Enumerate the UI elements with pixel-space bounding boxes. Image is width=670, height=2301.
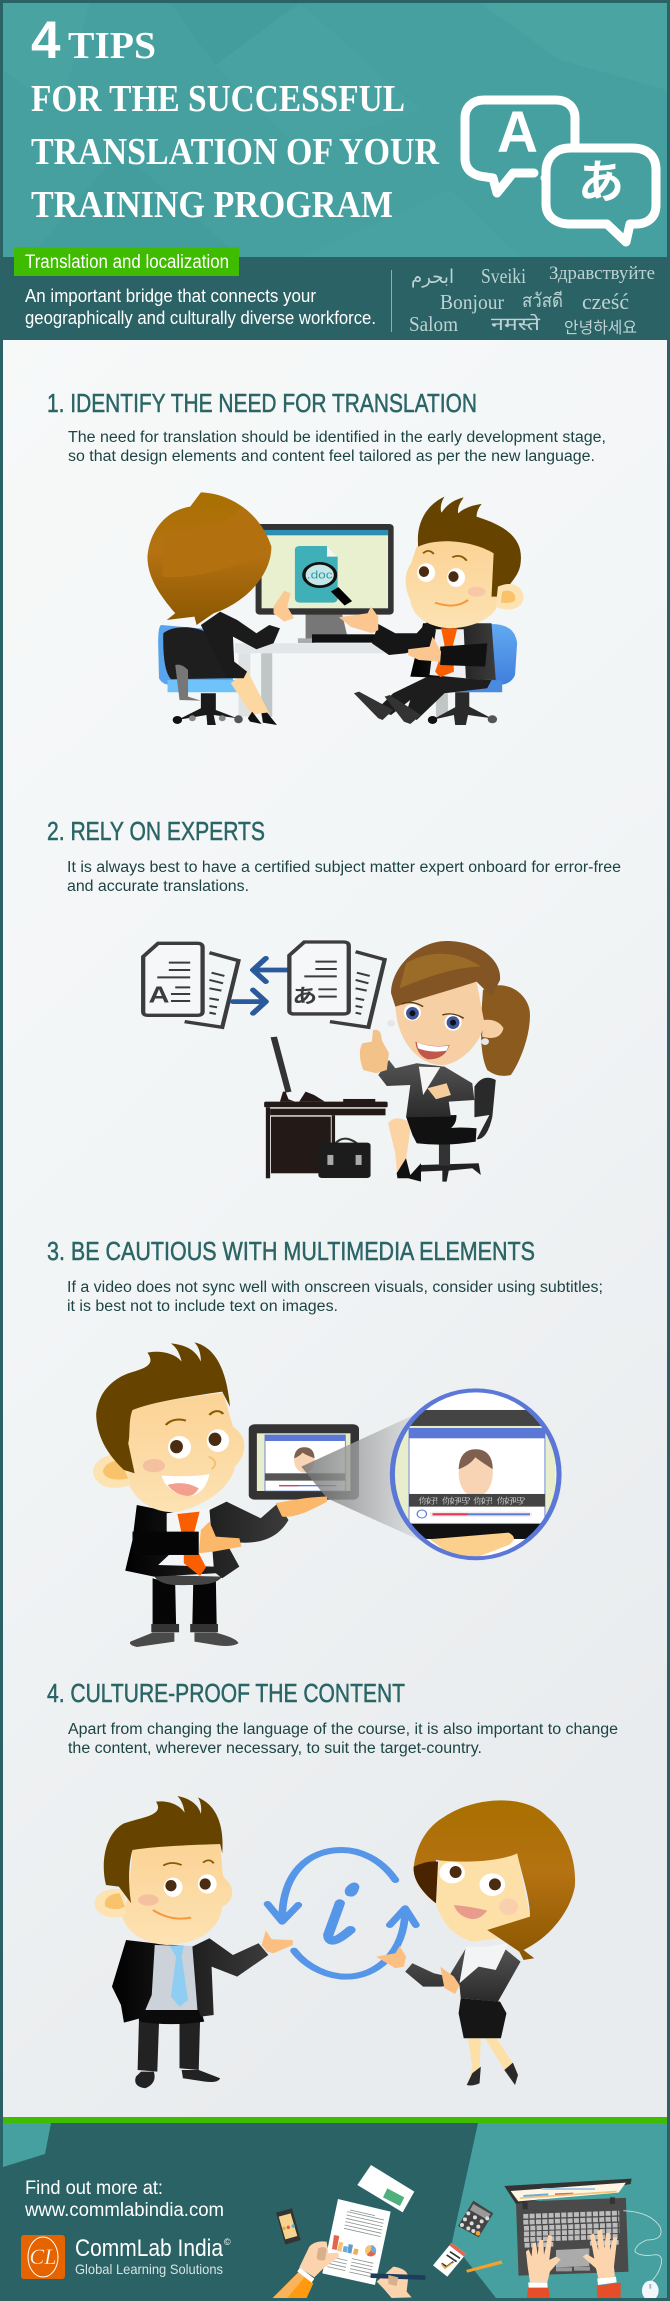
greetings in many languages: cześć (582, 289, 629, 314)
subheader text: An important bridge that connects your (25, 285, 316, 306)
tip 4 text: Apart from changing the language of the course, it is also important to change (68, 1721, 618, 1738)
tip 1 text: so that design elements and content feel tailored as per the new language. (68, 448, 595, 465)
footer panel (0, 2123, 670, 2301)
CommLab India logo (21, 2235, 231, 2279)
greetings in many languages: สวัสดี (522, 290, 563, 312)
notepad (433, 2243, 466, 2277)
green label: translation and localization (14, 247, 239, 276)
footer text: find out more: Find out more at: (25, 2178, 163, 2199)
icon: translation speech bubbles: A (497, 100, 538, 165)
icon: translated document (289, 942, 385, 1027)
mouse and cable (623, 2211, 662, 2301)
illustration: expert with documents (143, 941, 530, 1182)
CommLab India logo: CommLab India (75, 2235, 224, 2262)
title (31, 11, 439, 226)
greetings in many languages: नमस्ते (491, 313, 541, 335)
tip 4 text: the content, wherever necessary, to suit the target-country. (68, 1740, 482, 1757)
CommLab India logo: CL (30, 2244, 56, 2269)
illustration: two colleagues at a monitor (147, 492, 524, 725)
tip 2 text (67, 859, 621, 895)
subheader band (0, 257, 670, 340)
icon: document with magnifier: .doc (307, 569, 333, 581)
tip 4 heading: 4. CULTURE-PROOF THE CONTENT (47, 1678, 405, 1708)
greetings in many languages: Bonjour (440, 290, 504, 314)
desk with monitor and bag (264, 1037, 388, 1178)
tip 2 heading: 2. RELY ON EXPERTS (47, 816, 265, 846)
icon: circular information arrows (268, 1850, 416, 1977)
icon: source document: A (149, 982, 170, 1008)
tip 1 text (68, 429, 606, 465)
icon: translated document: あ (292, 981, 317, 1009)
greetings in many languages: 안녕하세요 (564, 314, 637, 338)
icon: translation speech bubbles (465, 100, 656, 242)
magnified lens with subtitled video (385, 1387, 568, 1563)
CommLab India logo: © (224, 2237, 231, 2247)
hand with pen right (370, 2267, 426, 2298)
tip 4 text (68, 1721, 618, 1757)
tablet (249, 1424, 359, 1500)
desk (235, 643, 448, 717)
subheader text: geographically and culturally diverse workforce. (25, 307, 376, 328)
green footer stripe (3, 2117, 667, 2123)
magnification cone (301, 1412, 421, 1541)
tip 3 text (67, 1279, 603, 1315)
tip 3 heading: 3. BE CAUTIOUS WITH MULTIMEDIA ELEMENTS (47, 1236, 535, 1266)
tip 1 heading: 1. IDENTIFY THE NEED FOR TRANSLATION (47, 388, 477, 418)
typing hands (526, 2229, 621, 2298)
title: FOR THE SUCCESSFUL (31, 78, 405, 120)
title: TRANSLATION OF YOUR (31, 131, 439, 173)
briefcase (318, 1139, 371, 1178)
tip 1 text: The need for translation should be identified in the early development stage, (68, 429, 606, 446)
woman seen from behind (147, 492, 294, 725)
footer text: find out more: www.commlabindia.com (24, 2200, 224, 2221)
tip 2 text: and accurate translations. (67, 878, 249, 895)
greetings in many languages (409, 263, 655, 338)
woman with thumbs up (360, 941, 530, 1182)
tip 3 text: it is best not to include text on images. (67, 1298, 338, 1315)
header panel (3, 3, 667, 257)
magnified lens with subtitled video: 你好！你好吗？你好！你好吗？ (418, 1494, 530, 1506)
title: TIPS (68, 25, 156, 67)
greetings in many languages: Здравствуйте (549, 263, 655, 284)
monitor (256, 524, 394, 643)
pencil (466, 2260, 503, 2273)
illustration: man and woman exchanging information (94, 1796, 575, 2088)
envelope (357, 2165, 414, 2212)
title: TRAINING PROGRAM (31, 184, 393, 226)
calculator (458, 2201, 493, 2237)
page background panel (3, 340, 667, 2118)
footer text: find out more (24, 2178, 224, 2221)
icon: document with magnifier (295, 546, 348, 603)
greetings in many languages: ابحرم (411, 266, 454, 288)
man in grey shirt (94, 1796, 293, 2088)
icon: source document (143, 943, 238, 1027)
tip 2 text: It is always best to have a certified subject matter expert onboard for error-free (67, 859, 621, 876)
greetings in many languages: Salom (409, 312, 458, 336)
title: 4 (31, 11, 61, 70)
green label: translation and localization: Translation and localization (25, 252, 229, 273)
laptop (504, 2179, 632, 2276)
report sheet (322, 2199, 391, 2285)
arrows between documents (233, 958, 287, 1013)
footer illustration: office desk from above (273, 2165, 662, 2301)
hand and sleeve left (273, 2241, 339, 2298)
subheader text (25, 285, 376, 328)
divider (390, 270, 392, 332)
seated man (339, 497, 524, 725)
phone (276, 2208, 301, 2245)
illustration: man showing subtitles on a tablet (93, 1342, 568, 1647)
man with open smile (93, 1342, 327, 1647)
tip 3 text: If a video does not sync well with onscreen visuals, consider using subtitles; (67, 1279, 603, 1296)
icon: translation speech bubbles: あ (578, 146, 624, 212)
woman in skirt suit (376, 1800, 575, 2086)
greetings in many languages: Sveiki (481, 264, 526, 288)
CommLab India logo: Global Learning Solutions (75, 2261, 223, 2277)
